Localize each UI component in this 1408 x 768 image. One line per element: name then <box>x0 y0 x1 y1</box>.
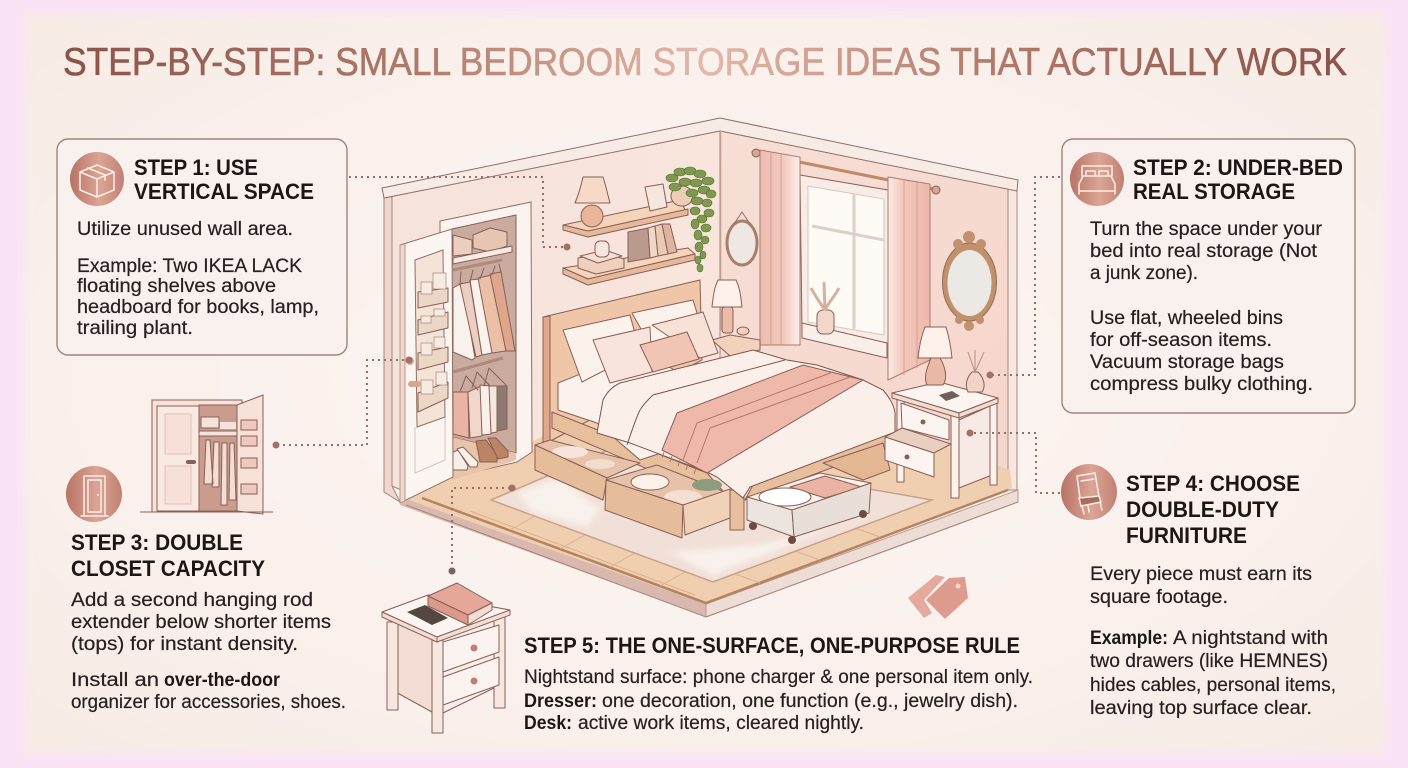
pink throw blanket <box>662 365 863 474</box>
headboard <box>543 280 702 445</box>
leader line: step 3 <box>272 356 412 448</box>
heading: step 1: STEP 1: USE <box>134 155 258 180</box>
text: step 2 body: Use flat, wheeled bins <box>1090 308 1283 329</box>
text: step 3 body <box>71 590 346 713</box>
heading: step 4: STEP 4: CHOOSE <box>1126 471 1300 496</box>
text: step 5 body: one decoration, one function (e.g., jewelry dish). <box>602 691 1018 712</box>
heading: step 4: DOUBLE-DUTY <box>1126 497 1279 522</box>
leader line: step 1 <box>349 177 570 250</box>
heading: step 2: STEP 2: UNDER-BED <box>1133 155 1343 180</box>
leader line: step 5 <box>448 484 516 574</box>
text: step 5 body: Dresser: <box>524 691 597 712</box>
back bedside lamp <box>712 280 760 356</box>
heading: step 1: VERTICAL SPACE <box>134 179 314 204</box>
text: step 5 body <box>524 667 1033 734</box>
text: step 3 body: organizer for accessories, shoes. <box>71 692 346 713</box>
window with curtains <box>752 149 940 380</box>
text: step 4 body: Every piece must earn its <box>1090 564 1312 585</box>
text: step 2 body: compress bulky clothing. <box>1090 374 1313 395</box>
heading: step 5: STEP 5: THE ONE-SURFACE, ONE-PURPOSE RULE <box>524 633 1020 658</box>
heading: step 4 <box>1126 471 1300 548</box>
icon: chair <box>1061 464 1117 520</box>
text: step 4 body: A nightstand with <box>1173 628 1328 649</box>
text: step 1 body <box>77 219 319 339</box>
text: step 4 body: Example: <box>1090 628 1168 649</box>
right wall <box>720 130 1017 490</box>
bed frame <box>552 412 893 530</box>
clothes upper rail <box>453 264 515 360</box>
wheeled storage bin <box>747 473 871 544</box>
text: step 2 body: Turn the space under your <box>1090 219 1323 240</box>
text: step 5 body: Nightstand surface: phone charger & one personal item only. <box>524 667 1033 688</box>
icon: door <box>66 466 122 522</box>
text: step 4 body: square footage. <box>1090 587 1228 608</box>
panel: step 4 <box>1061 464 1336 719</box>
text: step 2 body: a junk zone). <box>1090 263 1198 284</box>
floor platform <box>400 362 1018 617</box>
icon: price tags <box>908 575 968 619</box>
text: step 2 body: bed into real storage (Not <box>1090 241 1318 262</box>
heading: step 3: STEP 3: DOUBLE <box>71 530 243 555</box>
icon: bed <box>1070 152 1124 206</box>
icon: box <box>70 152 124 206</box>
text: step 1 body: headboard for books, lamp, <box>77 297 319 318</box>
plant <box>666 167 716 272</box>
text: step 5 body: active work items, cleared nightly. <box>578 713 864 734</box>
nightstand with open drawer <box>885 327 998 498</box>
text: step 4 body: two drawers (like HEMNES) <box>1090 651 1328 672</box>
text: step 4 body: leaving top surface clear. <box>1090 698 1312 719</box>
heading: step 2 <box>1133 155 1343 204</box>
clothes lower rail <box>453 368 507 438</box>
mattress <box>558 350 760 460</box>
text: step 1 body: trailing plant. <box>77 318 193 339</box>
panel: step 5 <box>382 575 1033 734</box>
text: step 3 body: Add a second hanging rod <box>71 590 313 611</box>
text: step 3 body: over-the-door <box>164 670 281 691</box>
left wall <box>384 130 720 498</box>
text: step 1 body: Utilize unused wall area. <box>77 219 293 240</box>
under-bed drawer two <box>605 465 730 538</box>
text: step 4 body <box>1090 564 1336 719</box>
heading: step 4: FURNITURE <box>1126 523 1247 548</box>
text: step 1 body: floating shelves above <box>77 276 276 297</box>
shoes <box>453 438 508 470</box>
heading: step 3 <box>71 530 265 581</box>
text: step 2 body <box>1090 219 1323 395</box>
text: step 2 body: Vacuum storage bags <box>1090 352 1284 373</box>
leader line: step 2 <box>986 177 1060 378</box>
text: step 3 body: (tops) for instant density. <box>71 634 298 655</box>
text: step 4 body: hides cables, personal items, <box>1090 675 1336 696</box>
heading: step 3: CLOSET CAPACITY <box>71 556 265 581</box>
text: step 3 body: extender below shorter items <box>71 612 331 633</box>
panel: step 1 <box>57 139 347 355</box>
text: step 5 body: Desk: <box>524 713 572 734</box>
panel: step 2 <box>1062 139 1355 413</box>
illustration: tidy nightstand <box>382 583 510 733</box>
leader line: step 4 <box>966 430 1060 493</box>
illustration: open closet <box>140 395 273 514</box>
under-bed drawer one <box>535 440 640 500</box>
crown moulding <box>382 118 1018 198</box>
wall mirrors <box>727 212 996 331</box>
heading: step 1 <box>134 155 314 204</box>
panel: step 3 <box>66 395 346 713</box>
text: step 2 body: for off-season items. <box>1090 330 1272 351</box>
text: step 1 body: Example: Two IKEA LACK <box>77 256 302 277</box>
closet <box>400 202 532 503</box>
open closet door <box>400 229 453 503</box>
back bed pillows <box>563 300 718 383</box>
floating shelves with lamp, books and plant <box>563 167 716 285</box>
illustration: isometric bedroom <box>272 118 1060 617</box>
text: step 3 body: Install an <box>71 670 159 691</box>
heading: step 2: REAL STORAGE <box>1133 179 1295 204</box>
duvet <box>597 350 895 498</box>
rug <box>491 445 932 582</box>
